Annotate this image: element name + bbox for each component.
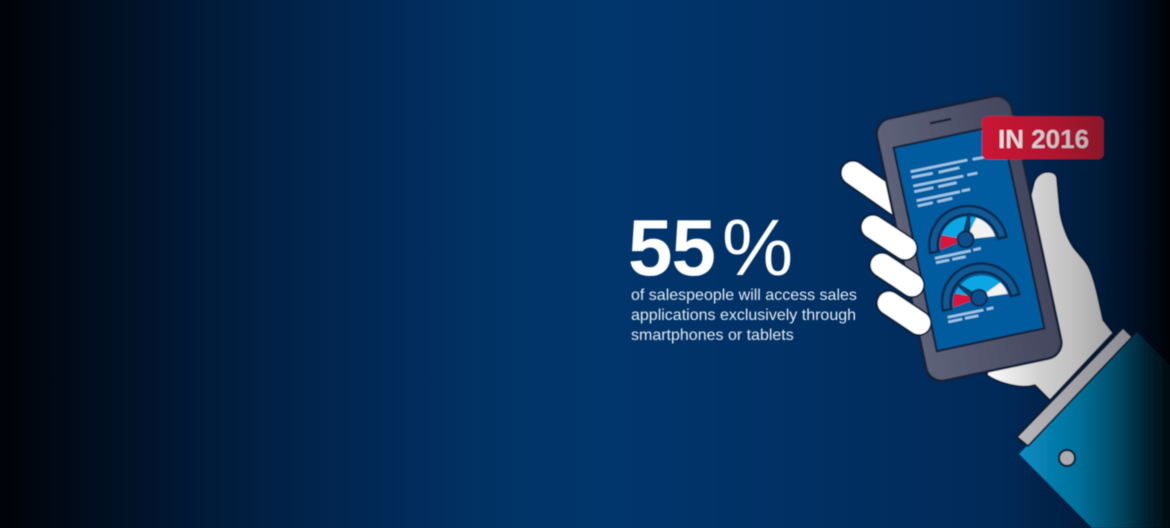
screen text lines: [911, 157, 993, 322]
description text: [631, 287, 857, 344]
badge IN 2016: [982, 116, 1104, 160]
description text: smartphones or tablets: [631, 327, 794, 344]
hand palm and thumb: [987, 172, 1113, 400]
statistic text block: [628, 203, 857, 344]
sleeve button: [1059, 450, 1075, 466]
sleeve: [1019, 332, 1170, 528]
phone body: [874, 93, 1064, 384]
big number 55%: [628, 203, 793, 292]
phone speaker: [930, 119, 951, 123]
phone screen: [894, 125, 1044, 351]
fingers over phone: [873, 227, 919, 323]
illustration: hand holding phone: [853, 93, 1170, 528]
big number 55%: %: [722, 203, 793, 292]
shirt cuff: [1017, 328, 1132, 446]
phone: [874, 93, 1064, 384]
description text: applications exclusively through: [631, 307, 856, 324]
description text: of salespeople will access sales: [631, 287, 857, 304]
big number 55%: 55: [628, 203, 715, 292]
index finger behind phone: [853, 173, 900, 206]
gauge 2: [935, 256, 1020, 314]
gauge 1: [922, 199, 1007, 255]
badge IN 2016: IN 2016: [998, 124, 1089, 154]
